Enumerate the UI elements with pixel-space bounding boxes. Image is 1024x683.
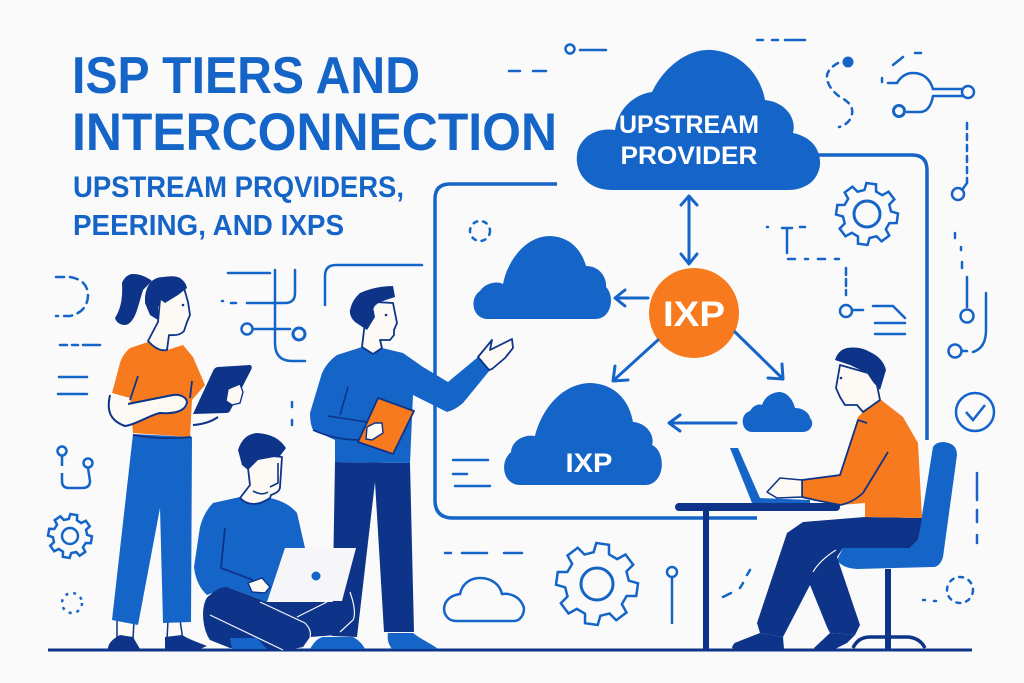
title: ISP TIERS AND bbox=[72, 47, 420, 105]
shoes bbox=[230, 637, 365, 649]
icon: check badge bbox=[956, 393, 994, 431]
arm bbox=[108, 395, 188, 426]
sleeve lines bbox=[802, 420, 888, 505]
tablet bbox=[358, 398, 414, 454]
cloud: upstream provider: UPSTREAM bbox=[619, 111, 759, 139]
sweater bbox=[194, 497, 305, 602]
crossed legs bbox=[203, 587, 355, 651]
shirt bbox=[112, 342, 205, 437]
hair bbox=[238, 433, 286, 470]
face details bbox=[253, 463, 278, 494]
arrow: IXP to left cloud bbox=[615, 290, 648, 306]
shoes bbox=[732, 633, 855, 650]
raised hand bbox=[478, 339, 513, 370]
ankles bbox=[117, 620, 183, 640]
IXP node: IXP bbox=[663, 295, 725, 334]
far arm bbox=[193, 417, 218, 425]
hand on tablet bbox=[366, 423, 383, 440]
subtitle bbox=[73, 171, 404, 242]
floor line bbox=[48, 648, 972, 652]
sleeve line bbox=[221, 528, 253, 580]
icon: left gear bbox=[45, 511, 95, 561]
icon: gear top right bbox=[832, 179, 902, 249]
arrow: IXP to small cloud bbox=[735, 332, 783, 379]
neck and face bbox=[148, 288, 190, 350]
arrow: small cloud to lower cloud bbox=[669, 415, 736, 431]
network frame bbox=[435, 155, 927, 518]
icon: circuit top right bbox=[757, 40, 974, 127]
neck and face bbox=[836, 365, 880, 412]
title: INTERCONNECTION bbox=[72, 103, 557, 162]
cloud: small bbox=[743, 392, 812, 432]
person: standing man presenting bbox=[310, 286, 513, 649]
person: seated man with laptop bbox=[194, 433, 365, 651]
trousers bbox=[332, 462, 414, 637]
title bbox=[72, 47, 557, 162]
hand on tablet bbox=[226, 384, 243, 405]
person: woman with tablet bbox=[108, 274, 252, 649]
chair bbox=[837, 442, 957, 650]
subtitle: UPSTREAM PRQVIDERS, bbox=[73, 171, 404, 204]
hand bbox=[248, 578, 270, 593]
neck and face bbox=[240, 455, 282, 504]
eye bbox=[182, 304, 184, 306]
ponytail bbox=[115, 274, 152, 325]
arrow: IXP to lower cloud bbox=[613, 340, 658, 381]
cloud: lower IXP: IXP bbox=[566, 448, 612, 478]
hem and sleeve lines bbox=[130, 376, 192, 438]
laptop bbox=[268, 548, 356, 601]
icon: circuit lower left bbox=[58, 446, 92, 488]
knee highlight bbox=[813, 550, 836, 572]
hair bbox=[145, 276, 187, 320]
decorative marks: left bbox=[56, 270, 305, 425]
cloud: upstream provider bbox=[577, 50, 820, 190]
decorative marks: center bbox=[325, 44, 677, 623]
icon: gear bottom bbox=[551, 538, 643, 630]
decorative marks: right bbox=[767, 123, 986, 358]
cloud: lower IXP bbox=[504, 383, 662, 485]
trousers bbox=[112, 434, 192, 625]
desk bbox=[675, 503, 840, 650]
hair bbox=[350, 286, 395, 330]
shoes bbox=[108, 635, 207, 649]
hand bbox=[767, 478, 802, 498]
sweater fold lines bbox=[313, 387, 367, 440]
neck and face bbox=[362, 302, 397, 354]
IXP node bbox=[649, 268, 739, 358]
eye bbox=[385, 314, 387, 316]
tablet bbox=[193, 365, 252, 414]
trousers bbox=[757, 517, 922, 637]
icon: outline cloud bottom bbox=[444, 578, 524, 621]
leg highlight lines bbox=[210, 592, 354, 650]
cloud: left bbox=[473, 236, 611, 319]
icon: dashed circle lower left bbox=[62, 593, 82, 613]
cloud: upstream provider: PROVIDER bbox=[620, 142, 758, 170]
decorative marks: lower right bbox=[723, 473, 977, 603]
sweater bbox=[310, 347, 490, 463]
subtitle: PEERING, AND IXPS bbox=[73, 210, 344, 242]
hair bbox=[835, 348, 886, 390]
shoes bbox=[310, 637, 365, 649]
laptop: desk bbox=[730, 448, 810, 503]
arrow: upstream to IXP bbox=[681, 196, 697, 264]
person: man at laptop bbox=[732, 348, 922, 650]
sweater bbox=[802, 399, 922, 518]
eye bbox=[840, 377, 842, 379]
